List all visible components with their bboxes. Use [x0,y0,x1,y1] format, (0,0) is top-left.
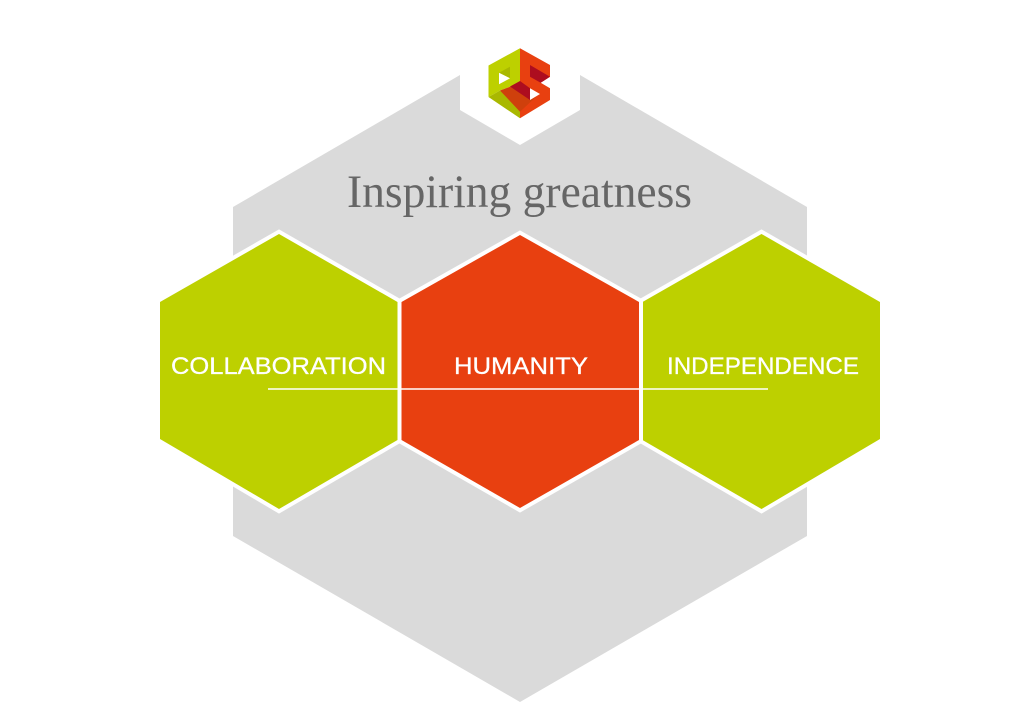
hexagon: independence [642,234,880,509]
label: independence: INDEPENDENCE [667,353,859,380]
background hexagon [233,75,807,702]
divider line [268,388,768,390]
hexagon: humanity [402,235,639,508]
title: Inspiring greatness [347,166,692,218]
hexagon: collaboration [160,234,398,509]
label: humanity: HUMANITY [454,353,588,380]
logo [488,48,550,118]
label: collaboration: COLLABORATION [171,353,386,380]
